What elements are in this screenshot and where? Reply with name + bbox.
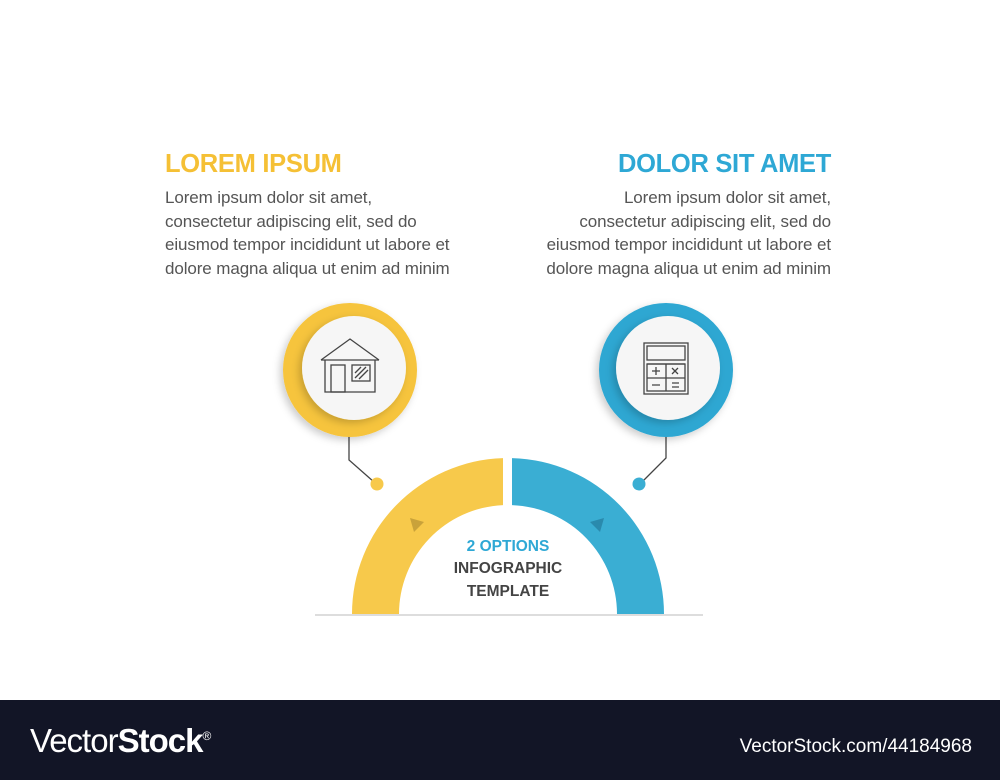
icon circle: calculator: [599, 303, 733, 437]
text block right: eiusmod tempor incididunt ut labore et: [547, 235, 831, 254]
icon circle: house: [283, 303, 417, 437]
center text: [454, 538, 562, 600]
semicircle: yellow half: [352, 458, 503, 614]
center text: 2 OPTIONS: [467, 538, 549, 555]
text block right: [546, 188, 831, 278]
arrows: [410, 518, 604, 532]
text block left: eiusmod tempor incididunt ut labore et: [165, 235, 449, 254]
text block right: dolore magna aliqua ut enim ad minim: [546, 259, 831, 278]
text block left: [165, 188, 450, 278]
center text: INFOGRAPHIC: [454, 560, 562, 577]
footer logo: VectorStock®: [30, 722, 210, 759]
connectors: [349, 436, 666, 482]
text block right: consectetur adipiscing elit, sed do: [579, 212, 831, 231]
heading: lorem ipsum: LOREM IPSUM: [165, 150, 342, 178]
text block left: Lorem ipsum dolor sit amet,: [165, 188, 372, 207]
base line: [315, 614, 703, 616]
center text: TEMPLATE: [467, 583, 549, 600]
text block left: consectetur adipiscing elit, sed do: [165, 212, 417, 231]
text block left: dolore magna aliqua ut enim ad minim: [165, 259, 450, 278]
text block right: Lorem ipsum dolor sit amet,: [624, 188, 831, 207]
footer bar: [0, 700, 1000, 780]
semicircle: blue half: [512, 458, 664, 614]
heading: dolor sit amet: DOLOR SIT AMET: [618, 150, 831, 178]
footer url: VectorStock.com/44184968: [740, 736, 972, 757]
